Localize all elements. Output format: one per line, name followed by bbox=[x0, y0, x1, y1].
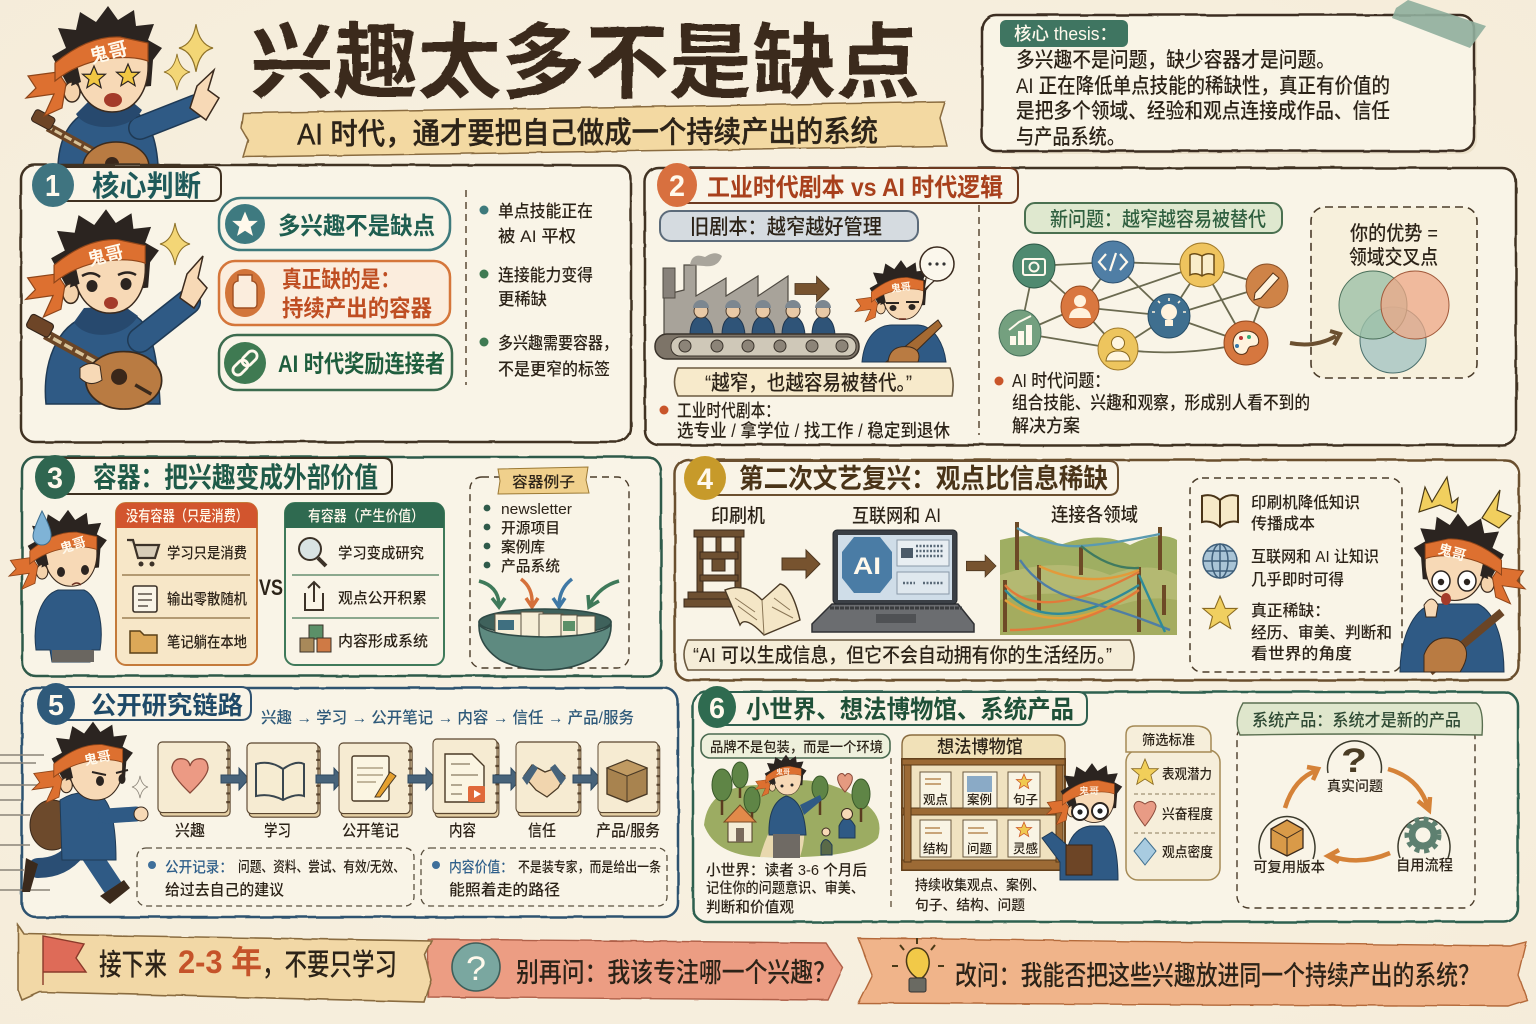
worried character: 鬼哥 bbox=[58, 534, 88, 556]
step: public notes: 公开笔记 bbox=[342, 822, 399, 840]
node bulb bbox=[1148, 294, 1190, 338]
small world text: 判断和价值观 bbox=[706, 899, 794, 916]
icon: share bbox=[305, 582, 323, 610]
box header bbox=[1237, 703, 1482, 735]
thesis text: 与产品系统。 bbox=[1016, 126, 1125, 149]
panel 6: small world, idea museum, system product bbox=[693, 686, 1518, 922]
filter criteria: 兴奋程度 bbox=[1162, 806, 1213, 822]
cycle: reusable version bbox=[1253, 816, 1325, 875]
AI question note: 解决方案 bbox=[1012, 416, 1080, 436]
museum caption: 持续收集观点、案例、 bbox=[915, 877, 1045, 893]
arrow to tired worker bbox=[795, 276, 829, 302]
AI question note: AI 时代问题： bbox=[1012, 371, 1110, 391]
step: interest: 兴趣 bbox=[175, 822, 205, 840]
industrial script note: 工业时代剧本： bbox=[677, 401, 780, 421]
quote bbox=[684, 640, 1134, 670]
curator character bbox=[1042, 763, 1122, 880]
landscape with ribbons bbox=[1000, 522, 1177, 635]
heading 6 bbox=[698, 686, 1087, 728]
subtitle banner: AI 时代，通才要把自己做成一个持续产出的系统 bbox=[297, 115, 878, 152]
panel 4: second renaissance bbox=[675, 456, 1525, 680]
panel 4: second renaissance: 连接各领域 bbox=[1051, 504, 1138, 526]
character pointing bbox=[25, 209, 207, 409]
worried character bbox=[9, 510, 107, 662]
step: trust bbox=[516, 742, 581, 840]
pill: the container: 持续产出的容器 bbox=[282, 295, 432, 321]
laptop: AI bbox=[853, 553, 881, 580]
step: product: 产品/服务 bbox=[596, 822, 660, 840]
step: content bbox=[433, 739, 499, 840]
node palette bbox=[1224, 321, 1268, 365]
note: public records: 给过去自己的建议 bbox=[165, 881, 284, 899]
table: with container bbox=[285, 503, 444, 665]
node chart bbox=[999, 310, 1041, 356]
icon: note bbox=[133, 586, 157, 612]
icon: book bbox=[1202, 495, 1238, 527]
laptop bbox=[812, 530, 974, 632]
heading 3: 3 bbox=[47, 462, 63, 495]
icon: question: ? bbox=[466, 950, 486, 988]
panel 2: industrial script vs AI logic bbox=[645, 163, 1516, 445]
curator character: 鬼哥 bbox=[1079, 785, 1099, 796]
idea museum: 结构 bbox=[923, 841, 948, 856]
bullets bbox=[480, 202, 618, 379]
heading 6: 6 bbox=[709, 693, 725, 725]
icon: magnifier bbox=[299, 538, 326, 566]
brand pill: 品牌不是包装，而是一个环境 bbox=[710, 739, 883, 755]
node book bbox=[1180, 243, 1224, 287]
bottom banner: next 2-3 years bbox=[18, 925, 432, 1002]
step: interest bbox=[158, 742, 230, 840]
thesis text: 多兴趣不是问题，缺少容器才是问题。 bbox=[1016, 49, 1335, 72]
scarcity notes: 真正稀缺： bbox=[1251, 602, 1330, 620]
thesis box bbox=[982, 15, 1477, 154]
tired character with speech bubble: 鬼哥 bbox=[890, 280, 912, 295]
heading 4: 第二次文艺复兴：观点比信息稀缺 bbox=[739, 464, 1108, 494]
cycle: real problem: 真实问题 bbox=[1327, 778, 1383, 794]
scarcity notes bbox=[1190, 478, 1402, 672]
header character: guitarist with star eyes: 鬼哥 bbox=[88, 38, 130, 68]
character pointing: 鬼哥 bbox=[86, 242, 125, 270]
container examples: 开源项目 bbox=[501, 520, 560, 537]
header character: guitarist with star eyes bbox=[26, 6, 219, 192]
table: with container: 内容形成系统 bbox=[338, 632, 428, 650]
exhibit cards bbox=[920, 772, 1040, 857]
cycle: own workflow: 自用流程 bbox=[1396, 857, 1453, 874]
pill: the container: 真正缺的是： bbox=[282, 266, 400, 292]
icon: folder bbox=[130, 631, 157, 653]
step: content: 内容 bbox=[449, 821, 476, 840]
cycle arrows bbox=[1285, 767, 1430, 862]
table: with container: 观点公开积累 bbox=[338, 590, 427, 607]
quote banner bbox=[674, 368, 953, 396]
tag: 容器例子 bbox=[512, 474, 575, 491]
subtitle banner bbox=[241, 102, 947, 157]
step: learn: 学习 bbox=[264, 821, 291, 840]
washi tape bbox=[1392, 0, 1486, 48]
AI question note bbox=[994, 371, 1310, 436]
quote: “AI 可以生成信息，但它不会自动拥有你的生活经历。” bbox=[693, 644, 1112, 667]
scarcity notes: 经历、审美、判断和 bbox=[1251, 623, 1392, 642]
museum caption: 句子、结构、问题 bbox=[915, 897, 1025, 913]
old script pill: 旧剧本：越窄越好管理 bbox=[690, 215, 882, 239]
cycle: real problem bbox=[1327, 741, 1383, 794]
surprised character: 鬼哥 bbox=[1436, 541, 1468, 564]
industrial script note: 选专业 / 拿学位 / 找工作 / 稳定到退休 bbox=[677, 420, 950, 441]
cycle: real problem: ? bbox=[1341, 742, 1367, 780]
note: public records: 公开记录： bbox=[165, 859, 233, 876]
scarcity notes: 印刷机降低知识 bbox=[1251, 494, 1360, 512]
skills network bbox=[999, 241, 1288, 370]
bullets: 被 AI 平权 bbox=[498, 227, 576, 246]
bottom banner: next 2-3 years: 2-3 年 bbox=[178, 944, 262, 980]
note: public records: 问题、资料、尝试、有效/无效、 bbox=[238, 859, 405, 876]
heading 2: 2 bbox=[669, 170, 685, 203]
tired character with speech bubble bbox=[855, 247, 954, 362]
pill: many interests bbox=[219, 198, 450, 250]
icon: light bulb bbox=[892, 938, 944, 992]
container examples: 案例库 bbox=[501, 538, 545, 556]
small world scene: 鬼哥 bbox=[776, 767, 790, 776]
note: content value: 能照着走的路径 bbox=[449, 881, 560, 899]
heading 2 bbox=[657, 163, 1018, 207]
node code bbox=[1092, 241, 1134, 283]
node person orange bbox=[1061, 286, 1099, 328]
pill: many interests: 多兴趣不是缺点 bbox=[278, 213, 435, 240]
heading 5: 5 bbox=[48, 690, 64, 722]
heading 2: 工业时代剧本 vs AI 时代逻辑 bbox=[707, 174, 1003, 202]
icon: flag bbox=[43, 936, 86, 985]
table: with container: 有容器（产生价值） bbox=[308, 508, 424, 525]
node camera bbox=[1013, 244, 1055, 288]
heading 3 bbox=[35, 455, 392, 499]
table: without container: 输出零散随机 bbox=[167, 591, 247, 608]
thesis tag: 核心 thesis： bbox=[1014, 24, 1117, 44]
small world scene bbox=[704, 755, 880, 858]
bottom banner: ask instead bbox=[858, 938, 1527, 1006]
new problem pill bbox=[1025, 203, 1282, 233]
bullets: 连接能力变得 bbox=[498, 265, 593, 285]
container examples: newsletter bbox=[501, 501, 572, 518]
thesis tag bbox=[1000, 20, 1128, 47]
museum caption bbox=[915, 877, 1045, 913]
filter criteria: 观点密度 bbox=[1162, 844, 1213, 860]
heading 1 bbox=[32, 163, 221, 207]
cycle: own workflow bbox=[1396, 818, 1453, 874]
filter criteria bbox=[1126, 726, 1220, 880]
bullets: 更稀缺 bbox=[498, 290, 547, 309]
panel 4: second renaissance: 互联网和 AI bbox=[852, 505, 941, 527]
note: content value: 内容价值： bbox=[449, 859, 513, 876]
arrow to venn bbox=[1290, 331, 1340, 345]
bullets: 单点技能正在 bbox=[498, 202, 593, 221]
small world text: 记住你的问题意识、审美、 bbox=[706, 879, 864, 897]
VS: VS bbox=[259, 575, 283, 600]
container examples: 产品系统 bbox=[501, 557, 560, 575]
panel 1: core judgement bbox=[21, 163, 631, 442]
bottom banner: next 2-3 years: 接下来 bbox=[99, 949, 167, 982]
bullets: 不是更窄的标签 bbox=[498, 359, 610, 379]
scarcity notes: 几乎即时可得 bbox=[1251, 571, 1344, 589]
arrows into basin bbox=[479, 579, 619, 607]
node pencil bbox=[1246, 264, 1288, 308]
filter criteria: 筛选标准 bbox=[1142, 732, 1195, 748]
thesis text: 是把多个领域、经验和观点连接成作品、信任 bbox=[1016, 100, 1390, 123]
running character bbox=[0, 722, 148, 904]
tag bbox=[498, 467, 589, 494]
small world text bbox=[706, 862, 867, 916]
heading 3: 容器：把兴趣变成外部价值 bbox=[93, 462, 378, 493]
AI question note: 组合技能、兴趣和观察，形成别人看不到的 bbox=[1012, 393, 1310, 413]
surprised character bbox=[1400, 477, 1525, 672]
heading 5 bbox=[37, 683, 251, 725]
table: without container: 笔记躺在本地 bbox=[167, 634, 247, 651]
step: product bbox=[596, 742, 660, 840]
panel 3: containers bbox=[9, 455, 661, 676]
panel 4: second renaissance: 印刷机 bbox=[711, 505, 765, 527]
industrial script note bbox=[660, 401, 950, 441]
cycle: reusable version: 可复用版本 bbox=[1253, 859, 1325, 875]
panel 5: public research chain bbox=[0, 683, 678, 917]
scarcity notes: 传播成本 bbox=[1251, 515, 1315, 533]
scarcity notes: 看世界的角度 bbox=[1251, 644, 1352, 663]
venn box: 你的优势 = bbox=[1350, 222, 1438, 245]
heading 6: 小世界、想法博物馆、系统产品 bbox=[746, 696, 1074, 724]
old script pill bbox=[660, 211, 918, 241]
bottom banner: stop asking bbox=[428, 939, 843, 1000]
flow line: 兴趣 → 学习 → 公开笔记 → 内容 → 信任 → 产品/服务 bbox=[261, 708, 634, 727]
idea museum: 问题 bbox=[967, 842, 992, 856]
table: with container: 学习变成研究 bbox=[338, 544, 424, 562]
idea museum bbox=[902, 735, 1065, 870]
small world text: 小世界：读者 3-6 个月后 bbox=[706, 862, 867, 879]
heading 4 bbox=[684, 456, 1118, 500]
box header: 系统产品：系统才是新的产品 bbox=[1252, 711, 1461, 730]
icon: cart bbox=[127, 540, 159, 566]
icon: cubes bbox=[300, 625, 331, 652]
heading 1: 核心判断 bbox=[92, 170, 201, 203]
basin bbox=[479, 609, 611, 670]
pill: AI connectors: AI 时代奖励连接者 bbox=[278, 351, 445, 378]
scarcity notes: 互联网和 AI 让知识 bbox=[1251, 548, 1379, 566]
running character: 鬼哥 bbox=[83, 748, 112, 768]
brand pill bbox=[701, 734, 890, 758]
idea museum: 观点 bbox=[923, 792, 948, 807]
step: public notes bbox=[339, 743, 412, 840]
heading 1: 1 bbox=[45, 168, 60, 203]
thesis text: AI 正在降低单点技能的稀缺性，真正有价值的 bbox=[1016, 75, 1390, 98]
icon: globe bbox=[1203, 544, 1237, 578]
venn box bbox=[1311, 207, 1477, 378]
factory and conveyor bbox=[655, 253, 859, 359]
idea museum: 案例 bbox=[967, 792, 992, 807]
title: 兴趣太多不是缺点 bbox=[250, 18, 920, 109]
table: without container: 学习只是消费 bbox=[167, 544, 247, 562]
note: public records bbox=[137, 848, 414, 906]
heading 5: 公开研究链路 bbox=[91, 692, 243, 720]
container examples bbox=[470, 467, 629, 670]
idea museum: 想法博物馆 bbox=[937, 737, 1023, 757]
thesis text bbox=[1016, 49, 1390, 149]
step: trust: 信任 bbox=[528, 822, 556, 840]
arrow press to laptop bbox=[782, 550, 820, 578]
note: content value bbox=[421, 848, 667, 906]
idea museum: 灵感 bbox=[1013, 841, 1038, 856]
bottom banner: next 2-3 years: ，不要只学习 bbox=[262, 949, 397, 982]
bullets: 多兴趣需要容器， bbox=[498, 333, 618, 353]
table: without container bbox=[116, 503, 257, 665]
icon: star bbox=[1203, 596, 1237, 629]
table: without container: 没有容器（只是消费） bbox=[126, 508, 248, 525]
new problem pill: 新问题：越窄越容易被替代 bbox=[1050, 207, 1266, 231]
idea museum: 句子 bbox=[1013, 792, 1038, 807]
printing press and book bbox=[684, 530, 800, 635]
pill: AI connectors bbox=[219, 335, 452, 390]
icon: question bbox=[452, 943, 500, 991]
pill: the container bbox=[219, 261, 450, 325]
arrow laptop to landscape bbox=[966, 555, 996, 577]
heading 4: 4 bbox=[697, 463, 713, 496]
venn box: 领域交叉点 bbox=[1349, 246, 1438, 269]
note: content value: 不是装专家，而是给出一条 bbox=[518, 859, 661, 875]
step: learn bbox=[247, 743, 320, 840]
system product box bbox=[1237, 703, 1482, 908]
quote banner: “越窄，也越容易被替代。” bbox=[705, 371, 912, 395]
bottom banner: stop asking: 别再问：我该专注哪一个兴趣？ bbox=[516, 958, 836, 988]
filter criteria: 表观潜力 bbox=[1162, 766, 1212, 782]
node person yellow bbox=[1098, 328, 1138, 370]
